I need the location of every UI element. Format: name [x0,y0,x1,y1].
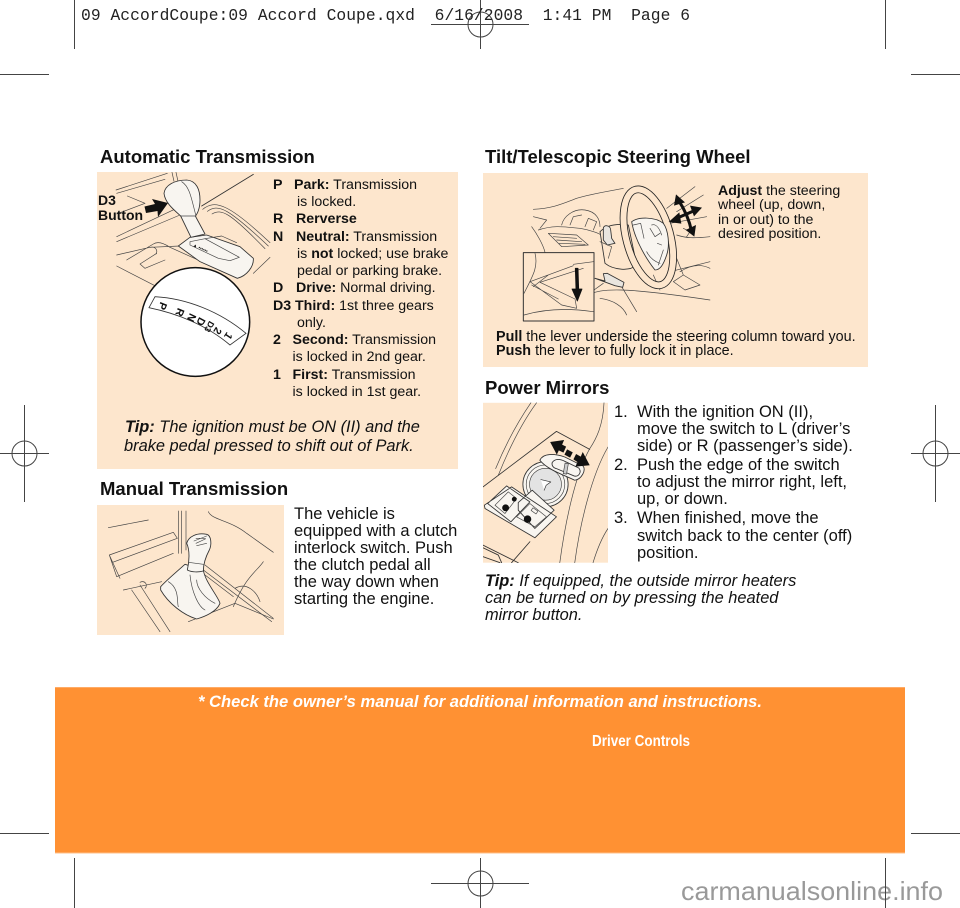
illustration: steering wheel [523,184,710,321]
gear position list: is locked in 2nd gear. [292,349,426,365]
illustration: mirror switch [483,402,608,563]
numbered instructions: up, or down. [637,490,728,508]
text: adjust steering wheel: Adjust the steering [718,183,840,199]
gear position list: Drive: Normal driving. [296,280,436,296]
heading: manual transmission: Manual Transmission [100,478,288,499]
numbered instructions: When finished, move the [637,509,819,527]
text: pull and push lever: Push the lever to fully lock it in place. [496,343,734,359]
text: pull and push lever [496,329,856,359]
heading: power mirrors: Power Mirrors [485,377,609,398]
gear position list: D [273,280,283,296]
inset: gear position magnifier: D3 [202,319,216,334]
inset: gear position magnifier: D [193,315,208,328]
section: steering wheel [483,146,868,367]
text: clutch interlock: equipped with a clutch [294,522,457,540]
inset: gear position magnifier [141,268,250,376]
inset: gear position magnifier: 2 [210,325,224,336]
section label: driver controls: Driver Controls [592,733,690,750]
gear position list: Third: 1st three gears [295,298,434,314]
illustration: manual shifter [97,505,284,635]
illustration: automatic shifter: ▲ ▪▪▪▪▪▪ [192,242,209,254]
text: pull and push lever: Pull the lever underside the steering column toward you. [496,329,856,345]
panel: automatic transmission background [97,172,458,469]
numbered instructions: switch back to the center (off) [637,527,852,545]
inset: gear position magnifier: 1 [221,330,234,341]
numbered instructions: to adjust the mirror right, left, [637,473,847,491]
text: clutch interlock [294,505,457,608]
heading: tilt/telescopic steering wheel: Tilt/Telescopic Steering Wheel [485,146,751,167]
text: clutch interlock: The vehicle is [294,505,395,523]
gear position list: Park: Transmission [294,177,417,193]
numbered instructions: move the switch to L (driver’s [637,420,850,438]
numbered instructions: 2. [614,456,628,474]
text: adjust steering wheel [717,183,840,242]
inset: gear position magnifier: N [184,311,198,323]
text: clutch interlock: the clutch pedal all [294,556,431,574]
print slug line: 09 AccordCoupe:09 Accord Coupe.qxd 6/16/2008 1:41 PM Page 6 [81,6,690,25]
text: clutch interlock: interlock switch. Push [294,539,453,557]
tip: outside mirror heaters: can be turned on by pressing the heated [485,589,779,607]
text: clutch interlock: the way down when [294,573,439,591]
watermark: carmanualsonline.info [681,876,943,906]
gear position list: is locked. [297,194,356,210]
gear position list: D3 [273,298,291,314]
inset: gear position magnifier: R [172,306,186,318]
footnote: * Check the owner’s manual for additional information and instructions. [198,693,762,711]
text: clutch interlock: starting the engine. [294,590,434,608]
icon: tilt and telescopic adjustment arrows [669,194,702,237]
gear position list: pedal or parking brake. [297,263,442,279]
panel: steering wheel background [483,173,868,367]
inset: gear position magnifier: P [155,300,169,311]
text: adjust steering wheel: wheel (up, down, [717,197,825,213]
callout: d3 button label and arrow [98,192,168,223]
callout: d3 button label and arrow: Button [98,207,143,223]
numbered instructions: With the ignition ON (II), [637,403,813,421]
numbered instructions: side) or R (passenger’s side). [637,437,853,455]
icon: left and right switch arrows [550,440,590,467]
gear position list: only. [297,315,326,331]
tip: shifting out of park: Tip: The ignition must be ON (II) and the [125,418,420,436]
gear position list: P [273,177,282,193]
gear position list: N [273,229,283,245]
tip: outside mirror heaters: Tip: If equipped, the outside mirror heaters [485,572,796,590]
text: adjust steering wheel: in or out) to the [718,212,814,228]
gear position list: is locked in 1st gear. [292,384,421,400]
numbered instructions: 3. [614,509,628,527]
footer band [55,687,905,854]
tip: outside mirror heaters: mirror button. [485,606,582,624]
gear position list: 1 [273,367,281,383]
gear position list: Neutral: Transmission [296,229,437,245]
heading: automatic transmission: Automatic Transmission [100,146,315,167]
icon: arrow pointing to d3 button [144,199,168,217]
gear position list: is not locked; use brake [297,246,449,262]
section: automatic transmission [97,146,458,469]
text: adjust steering wheel: desired position. [718,226,821,242]
tip: outside mirror heaters [485,572,796,624]
gear position list: First: Transmission [292,367,415,383]
gear position list: 2 [273,332,281,348]
section: manual transmission [97,478,457,635]
numbered instructions: 1. [614,403,628,421]
tip: shifting out of park: brake pedal pressed to shift out of Park. [124,437,414,455]
callout: d3 button label and arrow: D3 [98,192,116,208]
gear position list: Second: Transmission [292,332,436,348]
numbered instructions [614,403,853,562]
numbered instructions: position. [637,544,698,562]
illustration: automatic shifter [116,172,270,288]
section: power mirrors [483,377,853,624]
numbered instructions: Push the edge of the switch [637,456,840,474]
gear position list: Rerverse [296,211,357,227]
tip: shifting out of park [124,418,420,455]
gear position list [273,177,449,400]
gear position list: R [273,211,283,227]
